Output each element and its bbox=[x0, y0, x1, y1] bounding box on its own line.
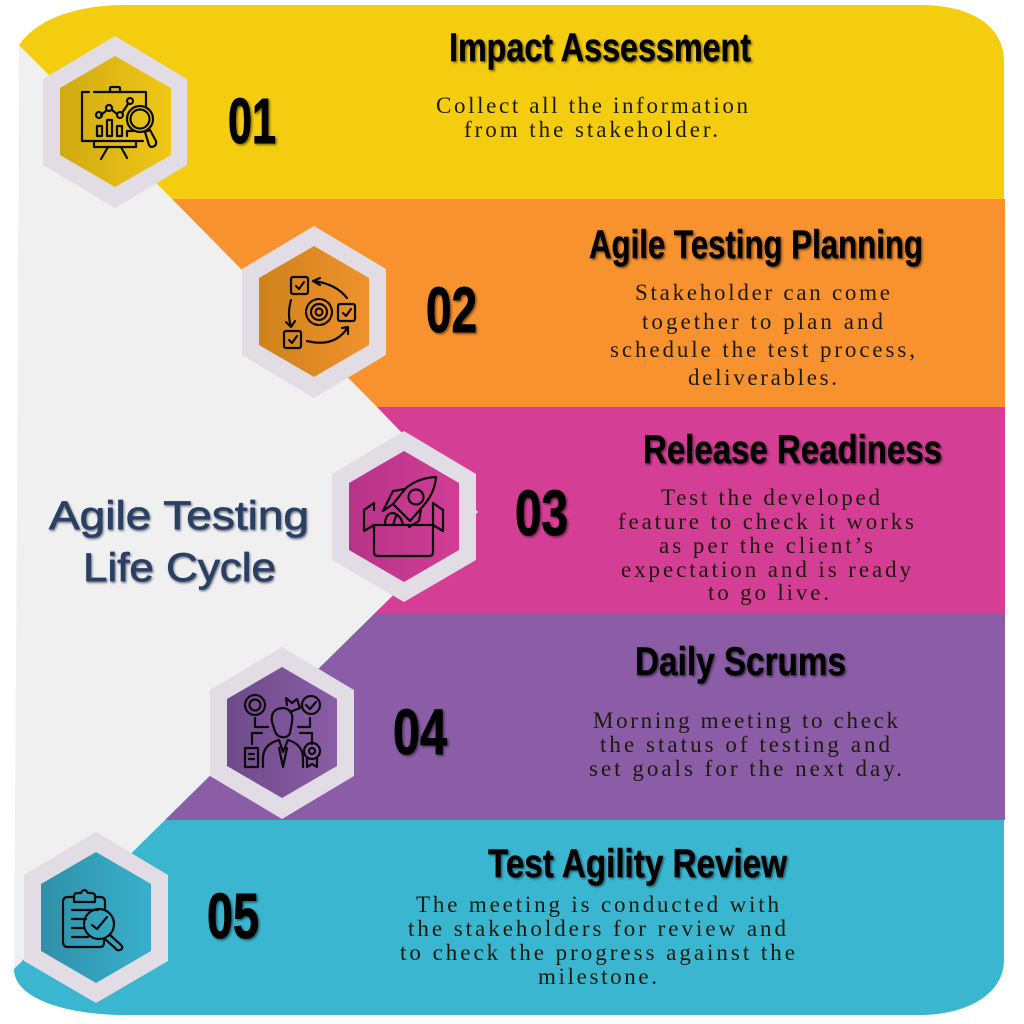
description bbox=[436, 93, 748, 142]
number 01: 01 bbox=[228, 85, 276, 157]
description: to check the progress against the bbox=[400, 940, 795, 965]
heading: Agile Testing Planning bbox=[589, 223, 923, 267]
heading: Release Readiness bbox=[643, 428, 942, 472]
yellow band bbox=[19, 5, 1004, 199]
description: set goals for the next day. bbox=[589, 756, 902, 781]
number 03: 03 bbox=[515, 477, 568, 549]
hexagon badge 3 bbox=[332, 431, 476, 602]
description: the status of testing and bbox=[600, 732, 890, 757]
description: schedule the test process, bbox=[610, 337, 915, 362]
icon: clipboard with magnifier check bbox=[63, 890, 122, 950]
description bbox=[618, 485, 914, 605]
icon: rocket launching from a box bbox=[364, 477, 443, 556]
orange band bbox=[172, 199, 1005, 407]
title: Agile Testing bbox=[49, 494, 309, 538]
hexagon badge 4 bbox=[210, 647, 354, 819]
description bbox=[400, 892, 795, 989]
icon: presentation board with magnifier bbox=[82, 87, 156, 159]
title: Life Cycle bbox=[83, 546, 276, 590]
magenta band bbox=[374, 407, 1005, 614]
description: Morning meeting to check bbox=[593, 708, 898, 733]
description: feature to check it works bbox=[618, 509, 914, 534]
heading: Test Agility Review bbox=[488, 842, 788, 886]
heading: Daily Scrums bbox=[635, 640, 846, 684]
panel: step 1 impact assessment bbox=[19, 5, 1004, 208]
icon: cycle of checks around a gear bbox=[284, 277, 355, 348]
hexagon badge 2 bbox=[242, 226, 386, 398]
description: Test the developed bbox=[661, 485, 880, 510]
description: expectation and is ready bbox=[621, 557, 912, 582]
panel: step 3 release readiness bbox=[332, 407, 1005, 614]
description: together to plan and bbox=[642, 309, 884, 334]
heading: Impact Assessment bbox=[449, 26, 751, 70]
description bbox=[589, 708, 902, 781]
number 05: 05 bbox=[207, 880, 259, 952]
description: the stakeholders for review and bbox=[408, 916, 786, 941]
panel: step 5 test agility review bbox=[14, 820, 1004, 1015]
description: Stakeholder can come bbox=[635, 280, 890, 305]
description: The meeting is conducted with bbox=[416, 892, 780, 917]
description: deliverables. bbox=[688, 365, 837, 390]
icon: team lead with gear, check and award bbox=[245, 695, 320, 767]
hexagon badge 5 bbox=[24, 832, 168, 1003]
purple band bbox=[165, 614, 1005, 820]
panel: step 4 daily scrums bbox=[165, 614, 1005, 820]
description: milestone. bbox=[538, 964, 657, 989]
description: to go live. bbox=[708, 580, 829, 605]
number 02: 02 bbox=[426, 274, 477, 346]
description: from the stakeholder. bbox=[464, 117, 718, 142]
number 04: 04 bbox=[393, 696, 447, 768]
teal band bbox=[14, 820, 1004, 1015]
panel: step 2 agile testing planning bbox=[172, 199, 1005, 407]
description bbox=[610, 280, 915, 390]
hexagon badge 1 bbox=[43, 36, 187, 208]
description: Collect all the information bbox=[436, 93, 748, 118]
background panel: light grey centre bbox=[14, 45, 478, 969]
description: as per the client’s bbox=[659, 533, 873, 558]
title bbox=[49, 494, 309, 590]
